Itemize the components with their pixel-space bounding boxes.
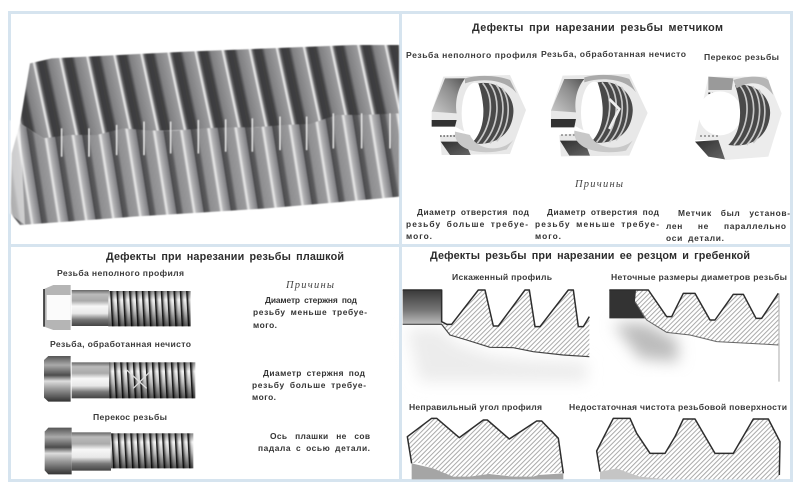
heading: causes: Причины <box>574 179 623 190</box>
label: poor surface finish: Недостаточная чистота резьбовой поверхности <box>569 402 787 412</box>
cause text 1 <box>253 295 367 330</box>
panel: threaded rod photograph <box>9 45 399 225</box>
rod notch lines <box>62 113 390 157</box>
icon: bolt with rough thread <box>44 356 195 402</box>
rod left fade <box>9 120 25 225</box>
cause text 2: резьбу меньше требуе- <box>535 219 659 229</box>
cause text 3: Ось плашки не сов <box>270 431 370 441</box>
diagram: wrong profile angle <box>407 418 563 479</box>
heading: Дефекты при нарезании резьбы метчиком <box>472 22 723 34</box>
cause text 2 <box>252 368 366 402</box>
icon: nut with incomplete profile <box>432 75 526 155</box>
heading: causes: Причины <box>285 280 334 291</box>
icon: nut with skewed thread <box>695 77 782 160</box>
cause text 1: резьбу меньше требуе- <box>253 307 367 317</box>
diagram: inaccurate diameters <box>609 290 779 382</box>
cause text 1: резьбу больше требуе- <box>406 219 528 229</box>
label: skewed thread: Перекос резьбы <box>704 52 779 62</box>
cause text 1: мого. <box>406 231 432 241</box>
cause text 2: мого. <box>535 231 561 241</box>
label: incomplete profile: Резьба неполного профиля <box>406 50 537 60</box>
cause text 2: Диаметр стержня под <box>263 368 366 378</box>
panel: tap defects <box>406 22 790 243</box>
label: incomplete profile: Резьба неполного профиля <box>57 268 184 278</box>
label: rough thread: Резьба, обработанная нечисто <box>541 49 686 59</box>
cause text 1 <box>406 207 530 241</box>
cause text 2: Диаметр отверстия под <box>547 207 660 217</box>
rod upper half <box>20 45 399 138</box>
cause text 2: мого. <box>252 392 276 402</box>
cause text 3: Метчик был установ- <box>678 208 790 218</box>
cause text 1: мого. <box>253 320 277 330</box>
label: inaccurate diameters: Неточные размеры диаметров резьбы <box>611 272 787 282</box>
cause text 3 <box>258 431 370 453</box>
cause text 2 <box>535 207 660 241</box>
cause text 1: Диаметр отверстия под <box>417 207 530 217</box>
heading: Дефекты при нарезании резьбы плашкой <box>106 251 344 263</box>
diagram: distorted profile <box>403 290 589 382</box>
label: rough thread: Резьба, обработанная нечисто <box>50 339 191 349</box>
panel: die defects <box>44 251 370 474</box>
rod lower half <box>11 113 399 225</box>
label: skewed thread: Перекос резьбы <box>93 412 167 422</box>
panel: cutter and chaser defects <box>403 250 787 479</box>
cause text 3: лен не параллельно <box>666 221 786 231</box>
cause text 2: резьбу больше требуе- <box>252 380 366 390</box>
label: distorted profile: Искаженный профиль <box>452 272 552 282</box>
cause text 3: оси детали. <box>666 233 724 243</box>
icon: nut with rough thread <box>551 74 648 156</box>
icon: bolt with incomplete profile <box>44 285 191 330</box>
label: wrong angle: Неправильный угол профиля <box>409 402 542 412</box>
heading: Дефекты резьбы при нарезании ее резцом и гребенкой <box>430 250 750 262</box>
icon: bolt with skewed thread <box>45 428 193 474</box>
diagram: poor surface finish <box>597 418 780 479</box>
cause text 1: Диаметр стержня под <box>265 295 358 305</box>
cause text 3 <box>666 208 790 243</box>
cause text 3: падала с осью детали. <box>258 443 370 453</box>
